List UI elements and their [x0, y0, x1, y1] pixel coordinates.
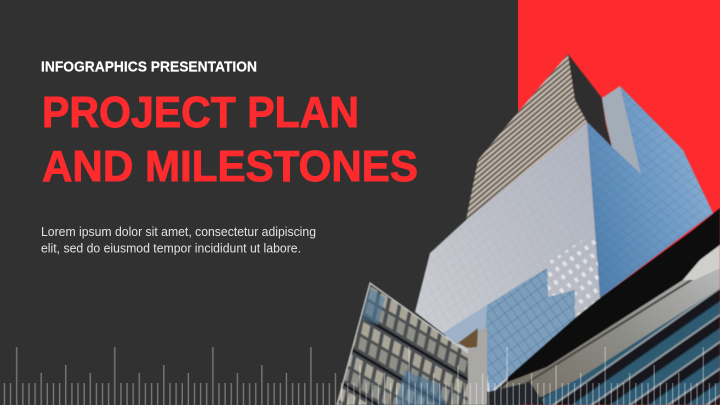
lower right building: dark glass bands [525, 288, 720, 405]
tower: blue reflection patch [484, 268, 575, 392]
ruler ticks [0, 340, 720, 405]
tower: pale blue reflection [443, 303, 490, 345]
concrete column [468, 327, 487, 405]
brown gap [458, 328, 478, 348]
reflection lower centre [395, 370, 445, 405]
lower right building: silver band [485, 245, 720, 405]
lower left building: blue reflections [360, 288, 445, 405]
building photo [337, 54, 720, 405]
tower crown: shaded side [568, 54, 612, 147]
dark lower windows [487, 382, 545, 405]
description line 1: Lorem ipsum dolor sit amet, consectetur adipiscing [41, 225, 316, 239]
black canopy band [495, 208, 720, 405]
tower: right glass face [587, 86, 713, 298]
title line 1: PROJECT PLAN [42, 88, 359, 137]
red accent panel [518, 0, 720, 405]
lower left building: windows [337, 283, 468, 405]
lower right building: dark structural beam [525, 262, 720, 384]
tower: pale lit windows [548, 232, 600, 318]
lower right building: pale curved roof [683, 245, 720, 280]
description text [41, 225, 316, 256]
subtitle: INFOGRAPHICS PRESENTATION [41, 60, 257, 76]
title line 2: AND MILESTONES [42, 142, 418, 191]
title [42, 88, 418, 191]
tower: left glass face [415, 122, 600, 395]
tower top: striped crown [466, 54, 587, 220]
description line 2: elit, sed do eiusmod tempor incididunt ut labore. [41, 242, 301, 256]
lower left building: white edge [337, 283, 468, 405]
tower: pale glass fin [602, 86, 641, 174]
reflection upper left [360, 288, 385, 325]
